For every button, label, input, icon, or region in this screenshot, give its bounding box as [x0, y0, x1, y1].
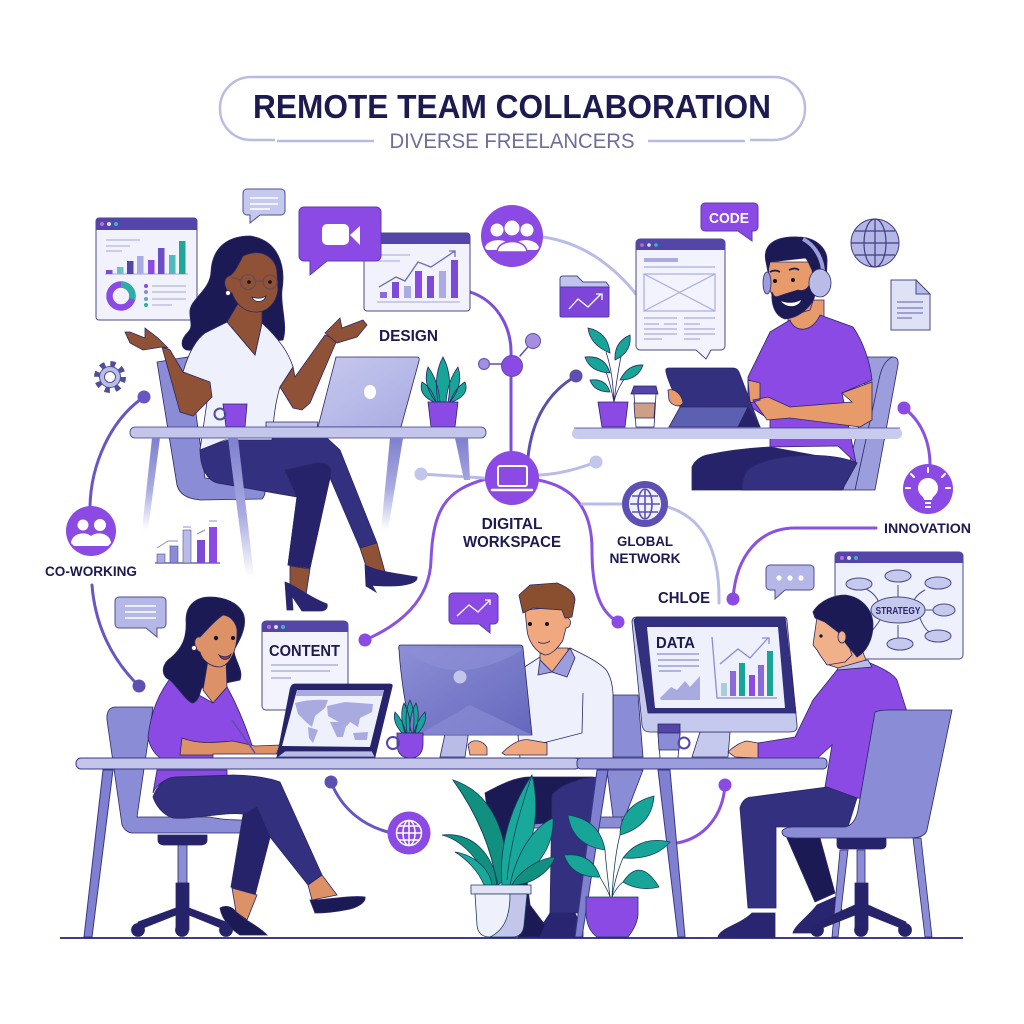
icon: co-working circle	[66, 506, 116, 556]
label: network: NETWORK	[610, 550, 680, 566]
connector network	[90, 237, 930, 843]
icon: code wireframe window	[636, 239, 725, 359]
label: digital workspace: DIGITAL	[482, 516, 542, 533]
subtitle: DIVERSE FREELANCERS	[390, 130, 634, 153]
blouse	[148, 675, 252, 758]
chair base	[158, 835, 207, 845]
desk plant	[421, 357, 466, 402]
figure: woman with glasses at desk	[125, 236, 486, 611]
coffee cup	[631, 386, 658, 394]
shoes and ankles	[290, 543, 385, 595]
icon: dashboard window	[96, 218, 197, 320]
figure: bearded man with headphones	[572, 237, 902, 490]
pants	[153, 775, 322, 895]
neck	[826, 640, 866, 668]
chair	[107, 707, 245, 833]
pants	[485, 777, 600, 905]
far leg	[787, 838, 835, 902]
icon: dots bubble	[766, 565, 814, 599]
arm left	[162, 347, 212, 416]
chair	[843, 357, 898, 490]
hand	[728, 741, 758, 758]
desk plant	[606, 352, 625, 402]
title banner	[220, 77, 805, 153]
legs	[84, 770, 685, 937]
collar	[837, 660, 872, 670]
near leg	[740, 787, 857, 908]
chair legs	[832, 838, 932, 937]
icon: global network node	[622, 481, 668, 527]
shirt	[183, 322, 293, 450]
coffee cup	[658, 724, 680, 733]
icon: globe	[851, 219, 899, 267]
label: content: CONTENT	[269, 643, 340, 660]
glasses	[231, 274, 277, 290]
far leg shading	[285, 463, 331, 568]
figure: right man lower body and chair	[718, 710, 952, 937]
mug plant	[387, 700, 426, 758]
forearm	[180, 738, 280, 755]
blouse below desk	[153, 770, 227, 793]
icon: document	[891, 280, 930, 330]
icon: gear	[97, 364, 123, 390]
smile	[252, 296, 266, 301]
pot	[471, 885, 531, 894]
icon: growth chart window	[364, 233, 470, 311]
arm right	[280, 335, 337, 410]
hand right	[325, 318, 367, 343]
neck	[540, 648, 568, 672]
label: co-working: CO-WORKING	[45, 564, 137, 579]
icon: small bar chart	[155, 521, 220, 563]
icon: innovation bulb	[903, 464, 953, 514]
headphones	[803, 239, 823, 276]
chair	[782, 710, 952, 838]
desk	[130, 427, 486, 438]
hair	[813, 595, 873, 657]
chair base	[857, 850, 865, 884]
icon: folder	[560, 276, 609, 317]
neck	[788, 300, 824, 330]
monitor	[399, 645, 532, 735]
figure: woman at left desk	[107, 597, 392, 936]
shared desk	[76, 758, 827, 937]
icon: globe node bottom	[388, 812, 430, 854]
icon: chart bubble	[449, 593, 498, 633]
head	[525, 606, 570, 655]
t-shirt body	[748, 315, 872, 463]
beard	[772, 275, 815, 319]
tablet	[666, 368, 760, 427]
hair	[163, 597, 245, 703]
ear	[838, 631, 846, 643]
label: global network: GLOBAL	[617, 533, 673, 549]
hair	[765, 237, 827, 290]
desk legs	[142, 438, 470, 530]
mug	[223, 404, 247, 427]
neck and chest	[227, 300, 262, 355]
icon: content window	[262, 621, 348, 710]
face	[195, 615, 237, 667]
pot	[586, 897, 638, 937]
collar	[538, 648, 575, 677]
icon: video call bubble	[299, 207, 381, 275]
monitor	[632, 617, 797, 732]
face	[768, 262, 815, 316]
desk	[572, 428, 902, 439]
figure: man in purple sweater	[632, 595, 908, 800]
node: digital workspace hub	[485, 451, 539, 505]
label: strategy: STRATEGY	[876, 605, 920, 617]
icon: code bubble	[701, 203, 758, 241]
icon: message bubble top	[243, 189, 285, 223]
plant: large potted	[442, 775, 555, 937]
head	[225, 253, 278, 312]
neck	[203, 660, 227, 703]
face	[813, 617, 852, 665]
label: workspace: WORKSPACE	[463, 534, 561, 551]
arms	[748, 380, 872, 427]
hands	[468, 740, 547, 755]
center man upper body and monitor	[399, 583, 613, 758]
monitor stand	[692, 732, 730, 757]
shoes	[718, 897, 842, 937]
heading: REMOTE TEAM COLLABORATION	[253, 88, 771, 125]
shirt	[515, 648, 613, 758]
icon: message bubble left	[115, 597, 166, 637]
ground line	[60, 937, 963, 939]
legs	[692, 447, 857, 490]
monitor stand	[440, 702, 473, 757]
label: design: DESIGN	[379, 328, 438, 345]
hand left	[125, 328, 168, 350]
chair	[157, 357, 265, 500]
feet	[232, 875, 337, 920]
tabletop	[76, 758, 580, 769]
laptop	[318, 357, 419, 427]
sweater	[758, 663, 908, 800]
chair back	[523, 695, 643, 828]
shoes	[538, 913, 583, 937]
hair	[182, 236, 285, 350]
label: code: CODE	[709, 210, 749, 227]
icon: team circle	[481, 205, 543, 267]
data label: DATA	[656, 635, 695, 652]
plant: small potted	[564, 796, 670, 937]
pants	[200, 438, 377, 568]
label: innovation: INNOVATION	[884, 520, 971, 536]
icon: strategy window	[835, 552, 963, 659]
laptop	[277, 684, 392, 757]
figure: center man chair and lower body	[485, 695, 643, 937]
hair	[519, 583, 575, 618]
world map	[295, 700, 373, 743]
label: chloe: CHLOE	[658, 590, 710, 607]
